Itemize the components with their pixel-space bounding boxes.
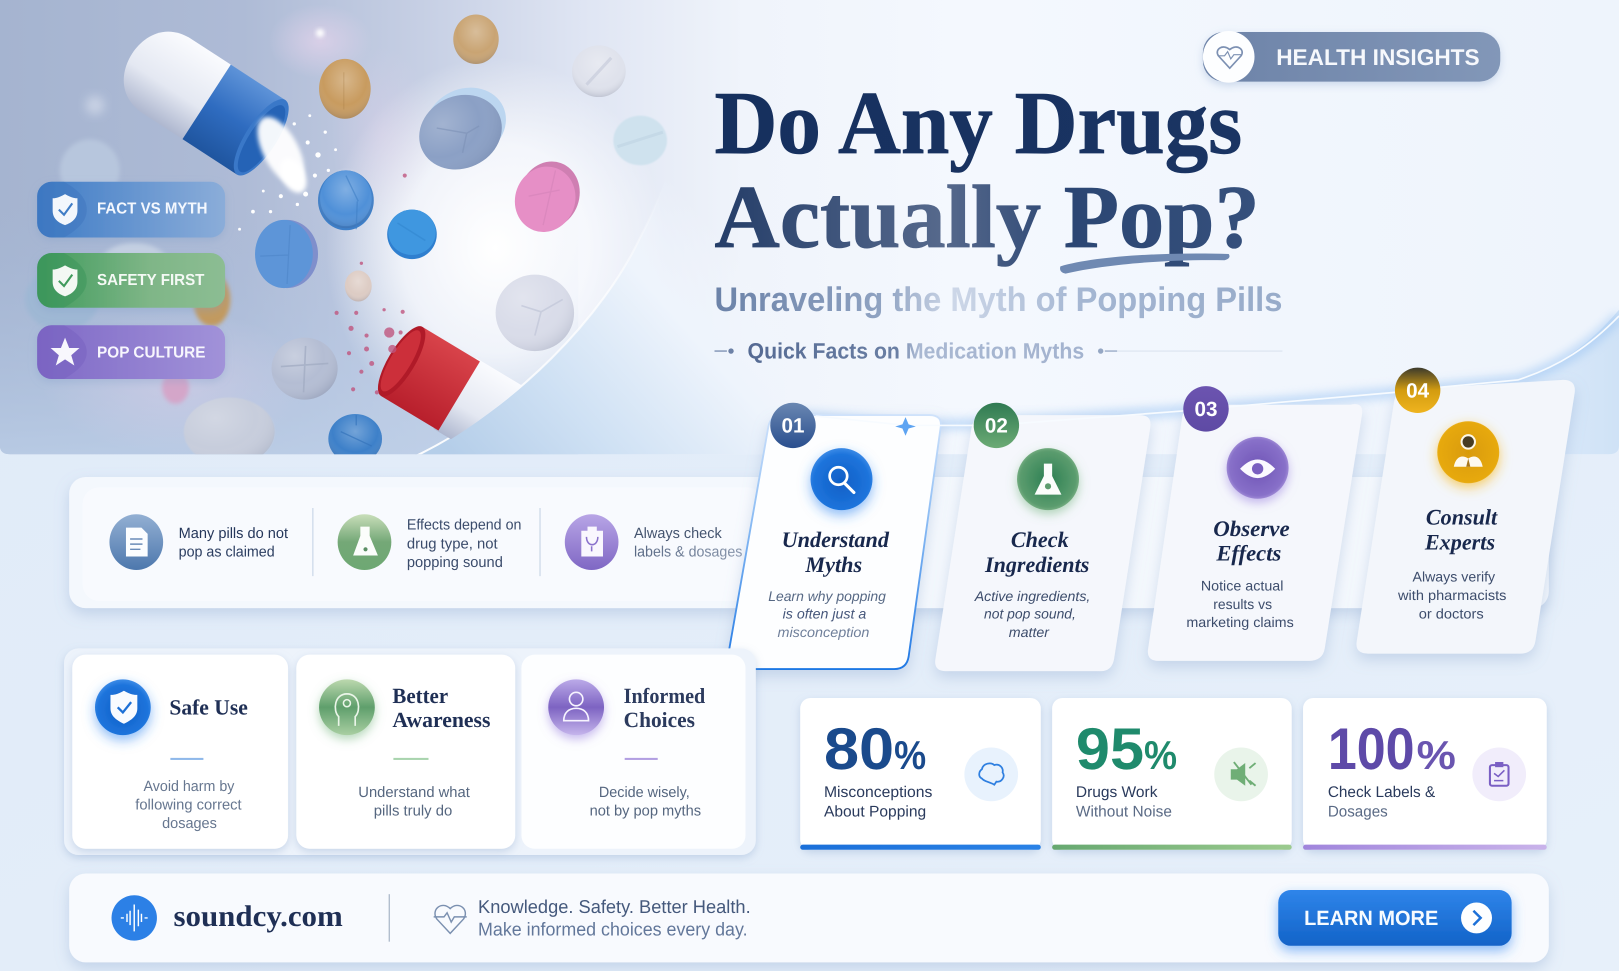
title: Actually Pop? <box>715 166 1260 266</box>
card 01: is often just a <box>783 606 867 622</box>
card 04: or doctors <box>1419 606 1484 622</box>
stat: 100 percent: Dosages <box>1328 803 1388 821</box>
tag: safety first <box>37 253 225 308</box>
quick facts heading: Quick Facts on Medication Myths <box>748 339 1084 363</box>
title underline stroke <box>1060 253 1230 274</box>
stat: 95 percent: % <box>1144 734 1177 779</box>
stat: 80 percent: About Popping <box>824 803 926 821</box>
icon: magnifier <box>811 448 872 510</box>
info: effects depend: Effects depend on <box>407 517 521 534</box>
benefit: informed choices: Decide wisely, <box>599 785 690 801</box>
benefit: informed choices: not by pop myths <box>590 803 701 820</box>
stat: 80 percent: % <box>894 734 926 779</box>
tag: pop culture <box>37 325 225 379</box>
benefit: safe use: following correct <box>135 797 242 814</box>
card 04: Consult <box>1426 505 1498 530</box>
card 04: Experts <box>1424 530 1495 554</box>
stat: 80 percent: 80 <box>824 717 894 783</box>
card 02: Check <box>1011 528 1069 552</box>
card 01: Myths <box>804 552 862 577</box>
stat: 95 percent: Drugs Work <box>1076 784 1158 801</box>
tag: fact vs myth <box>37 182 225 237</box>
label tags <box>37 182 225 379</box>
stat: 100 percent: 100 <box>1328 717 1415 783</box>
benefit: better awareness: Awareness <box>392 707 490 732</box>
icon: eye <box>1227 437 1289 499</box>
icon: heart badge <box>1203 31 1255 83</box>
button: learn more: LEARN MORE <box>1304 908 1438 930</box>
info: effects depend <box>338 514 521 571</box>
stat: 95 percent: 95 <box>1076 717 1144 783</box>
info: effects depend: drug type, not <box>407 536 498 552</box>
step cards <box>728 368 1575 671</box>
tag: fact vs myth: FACT VS MYTH <box>97 200 208 218</box>
card 04 <box>1356 368 1575 654</box>
subtitle: Unraveling the Myth of Popping Pills <box>715 280 1282 318</box>
stat: 100 percent: % <box>1417 734 1456 779</box>
card 01: 01 <box>781 415 804 438</box>
icon: doctor <box>1437 421 1499 483</box>
card 04: with pharmacists <box>1397 588 1507 603</box>
card 03: 03 <box>1195 399 1217 421</box>
timeline highlight line <box>816 316 1619 436</box>
badge: health insights <box>1203 31 1500 83</box>
benefit: safe use <box>72 655 288 849</box>
info: always check <box>565 514 742 570</box>
title <box>715 72 1260 266</box>
red and white capsule half <box>378 326 521 439</box>
card 03: Effects <box>1215 541 1281 566</box>
stat: 80 percent: Misconceptions <box>824 784 932 801</box>
footer bar: Make informed choices every day. <box>478 919 748 940</box>
icon: head <box>319 679 375 735</box>
stat cards <box>800 698 1547 850</box>
quick facts heading <box>715 339 1282 363</box>
icon: shield <box>95 679 151 735</box>
red particles <box>335 173 407 394</box>
title: Do Any Drugs <box>715 72 1242 173</box>
card 02: Ingredients <box>984 552 1089 577</box>
benefit: better awareness: Better <box>392 684 448 708</box>
footer bar: soundcy.com <box>173 900 343 933</box>
glowing timeline line <box>793 316 1619 425</box>
card 03 <box>1148 386 1362 661</box>
card 01: Understand <box>782 528 890 552</box>
card 03: marketing claims <box>1186 614 1294 630</box>
card 02 <box>935 403 1151 671</box>
card 03: Observe <box>1213 516 1290 541</box>
benefit: informed choices: Informed <box>624 684 706 708</box>
stat: 100 percent: Check Labels & <box>1328 784 1435 801</box>
icon: sound wave logo <box>112 895 157 941</box>
benefit: informed choices: Choices <box>624 707 695 732</box>
card 02: matter <box>1009 625 1050 640</box>
icon: brain <box>964 748 1018 801</box>
info: always check: Always check <box>634 526 722 542</box>
benefits panel <box>64 648 756 855</box>
card 03: results vs <box>1213 597 1272 612</box>
icon: person <box>548 679 604 735</box>
hero image area <box>0 0 1619 469</box>
big white and blue capsule <box>124 32 289 176</box>
icon: muted speaker <box>1214 748 1268 801</box>
card 04: Always verify <box>1412 569 1495 584</box>
tag: safety first: SAFETY FIRST <box>97 272 205 289</box>
white powder burst <box>238 110 337 231</box>
badge: health insights: HEALTH INSIGHTS <box>1276 44 1480 70</box>
icon: flask <box>1017 448 1079 510</box>
info band panel <box>69 477 1549 608</box>
icon: clipboard <box>1472 748 1526 801</box>
benefit: safe use: Avoid harm by <box>144 779 235 795</box>
benefit: safe use: dosages <box>162 816 217 832</box>
card 02: Active ingredients, <box>974 589 1090 604</box>
card 03: Notice actual <box>1201 578 1283 594</box>
benefit: better awareness <box>296 655 515 849</box>
stat: 80 percent <box>800 698 1041 850</box>
card 01: misconception <box>777 625 869 640</box>
info: effects depend: popping sound <box>407 554 503 571</box>
benefit: informed choices <box>521 655 745 849</box>
footer bar <box>69 874 1549 962</box>
button: learn more <box>1278 890 1512 946</box>
card 04: 04 <box>1406 380 1430 403</box>
card 02: 02 <box>985 415 1008 438</box>
info: many pills: pop as claimed <box>179 544 275 561</box>
icon: heart pulse <box>434 905 467 933</box>
tablets <box>184 14 667 466</box>
card 01: Learn why popping <box>768 589 886 604</box>
stat: 95 percent: Without Noise <box>1076 803 1172 821</box>
info: many pills <box>109 514 288 570</box>
footer bar: Knowledge. Safety. Better Health. <box>478 896 751 917</box>
benefit: safe use: Safe Use <box>169 695 248 720</box>
tag: pop culture: POP CULTURE <box>97 344 205 361</box>
stat: 100 percent <box>1303 698 1547 850</box>
card 01 <box>728 403 941 669</box>
benefit: better awareness: pills truly do <box>374 803 452 820</box>
benefit: better awareness: Understand what <box>358 785 470 801</box>
blurred background pills <box>25 139 230 404</box>
card 02: not pop sound, <box>984 606 1076 622</box>
swoosh: right-side light wave <box>422 289 760 454</box>
info: always check: labels & dosages <box>634 544 742 561</box>
stat: 95 percent <box>1052 698 1292 850</box>
info: many pills: Many pills do not <box>179 526 288 542</box>
